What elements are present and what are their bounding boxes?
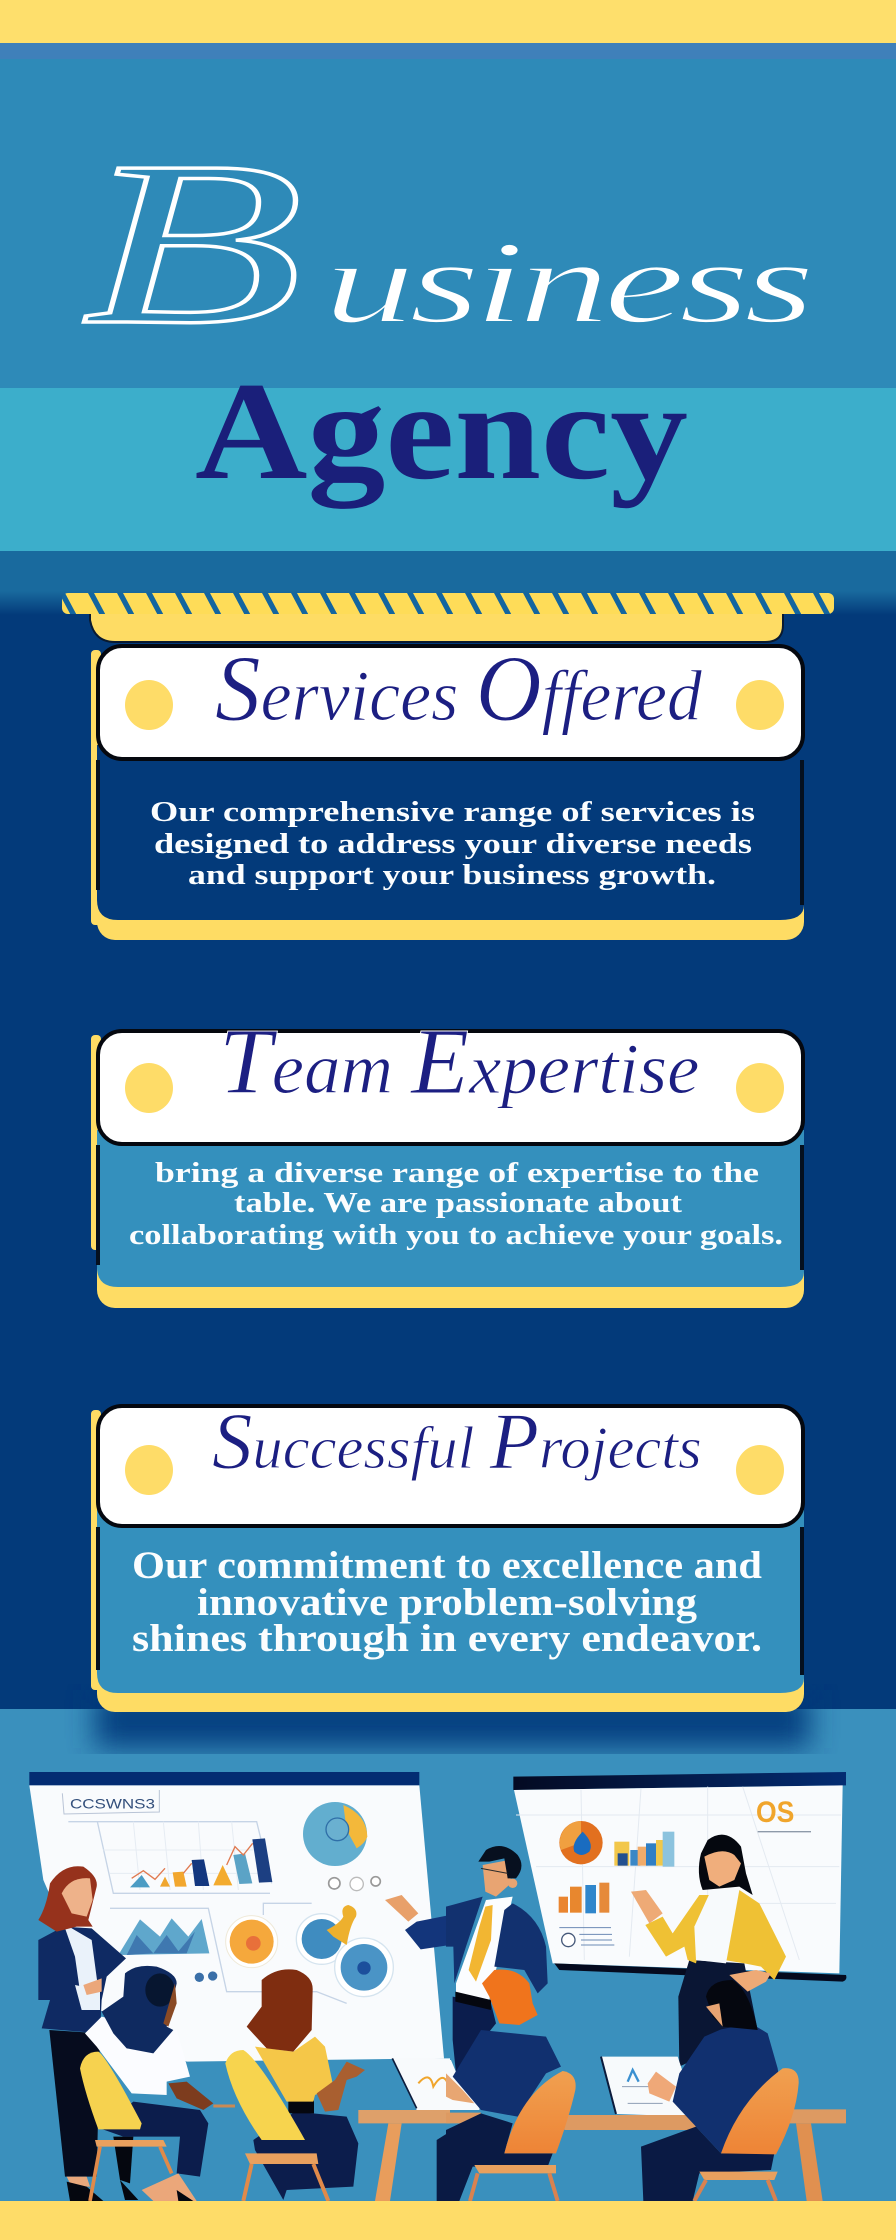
card 3 body text: Our commitment to excellence and — [132, 1544, 762, 1587]
header band: top highlight — [0, 43, 896, 59]
left presentation board — [29, 1772, 444, 2062]
card 2 body text: bring a diverse range of expertise to the — [155, 1157, 759, 1189]
right board donut chart — [559, 1821, 603, 1864]
card 3 body panel — [97, 1510, 804, 1693]
card 3 left yellow edge — [91, 1410, 101, 1690]
left presentation board: CCSWNS3 — [70, 1796, 155, 1812]
card 2 body side lines — [98, 1145, 802, 1270]
card: Team Expertise — [91, 1010, 804, 1308]
left board bar chart — [130, 1838, 272, 1887]
card 1 body text: designed to address your diverse needs — [154, 828, 752, 860]
header band: dark fade — [0, 551, 896, 591]
lower illustration background — [0, 1709, 896, 2209]
card 1 left dot — [125, 680, 173, 730]
card 1 left yellow edge — [91, 650, 101, 925]
right presentation board — [513, 1772, 846, 1982]
right board bar charts — [559, 1832, 674, 1913]
card 2 body text: collaborating with you to achieve your goals. — [129, 1219, 783, 1251]
header band: fade into navy — [0, 591, 896, 615]
card 1 yellow tab — [90, 612, 783, 642]
card 1 right dot — [736, 680, 784, 730]
bottom yellow bar — [0, 2201, 896, 2240]
card 3 right dot — [736, 1445, 784, 1495]
shadow under card 3 — [95, 1690, 810, 1748]
card: Successful Projects — [91, 1397, 804, 1712]
card 3 header plate — [98, 1406, 803, 1526]
card 1 body text: and support your business growth. — [188, 859, 716, 891]
title: Business: Business — [81, 113, 810, 373]
seated person with orange hair — [446, 1969, 576, 2201]
seated person in yellow top — [225, 1969, 365, 2201]
standing man in navy suit — [446, 1846, 548, 2073]
title: Agency: Agency — [195, 354, 688, 509]
card 2 right dot — [736, 1063, 784, 1113]
card 2 body text — [129, 1157, 783, 1251]
card 3 left dot — [125, 1445, 173, 1495]
card 2 bottom yellow edge — [97, 1250, 804, 1308]
left board pie chart — [303, 1802, 380, 1891]
card 2 header plate — [98, 1031, 803, 1144]
illustration: right half, board, presenters and seated team — [446, 1772, 846, 2201]
card 1 rope — [62, 593, 834, 614]
table and laptop — [446, 2057, 846, 2201]
left board circle charts — [226, 1905, 393, 1997]
illustration: left half, board and seated team — [29, 1772, 450, 2201]
card 2 body panel — [97, 1130, 804, 1287]
card 3 bottom yellow edge — [97, 1655, 804, 1712]
standing woman in yellow jacket — [631, 1835, 786, 2067]
card 1 body text: Our comprehensive range of services is — [150, 796, 755, 828]
left board area chart — [118, 1918, 217, 1982]
right board logo: OS — [756, 1796, 794, 1829]
card 3 body text — [132, 1544, 762, 1660]
right board legend — [559, 1928, 614, 1947]
card 1 bottom yellow edge — [97, 880, 804, 940]
presenter's pointing arm — [385, 1895, 450, 1949]
card 1 body text — [150, 796, 755, 891]
card 2 heading: Team Expertise — [219, 1010, 699, 1114]
card 2 body text: table. We are passionate about — [234, 1187, 682, 1219]
card 3 body side lines — [98, 1527, 802, 1675]
card 1 body side lines — [98, 760, 802, 905]
table and paper, left part — [358, 2058, 450, 2201]
card 1 body panel — [97, 745, 804, 920]
card 1 heading: Services Offered — [215, 637, 702, 741]
header band: blue — [0, 43, 896, 388]
card 3 heading: Successful Projects — [212, 1397, 702, 1486]
card 1 header plate — [98, 646, 803, 759]
card 2 left yellow edge — [91, 1035, 101, 1250]
seated person in white shirt — [80, 1966, 235, 2201]
card: Services Offered — [62, 593, 834, 940]
seated person with dark hair — [641, 1980, 799, 2201]
card 3 body text: shines through in every endeavor. — [132, 1617, 762, 1660]
card 2 left dot — [125, 1063, 173, 1113]
standing woman in navy blazer — [38, 1866, 126, 2201]
header band: light teal — [0, 388, 896, 551]
card 3 body text: innovative problem-solving — [197, 1581, 698, 1624]
top yellow bar — [0, 0, 896, 43]
